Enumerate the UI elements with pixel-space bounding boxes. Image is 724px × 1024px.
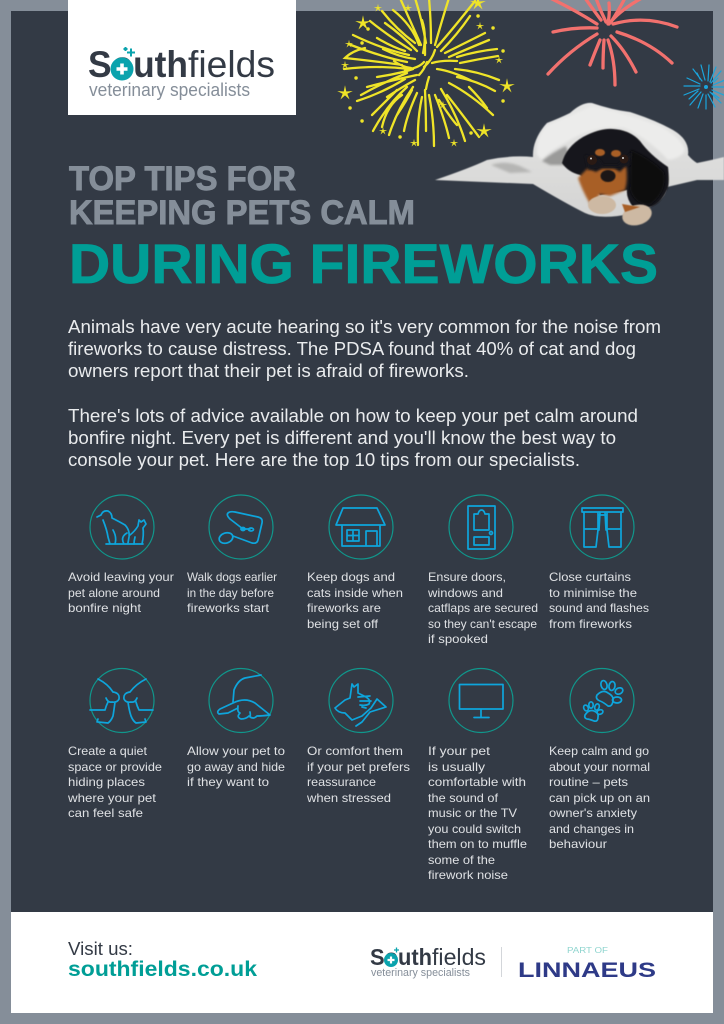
blue firework: [684, 65, 724, 109]
tip text: keep dogs and cats inside: fireworks are: [307, 601, 381, 615]
tip text: keep calm: owner's anxiety: [549, 806, 637, 820]
tip text: music or tv: comfortable with: [428, 775, 526, 789]
red firework: [548, 0, 677, 85]
intro paragraph two: bonfire night. Every pet is different and you'll know the best way to: [68, 427, 616, 448]
tip text: comfort them: if your pet prefers: [307, 760, 410, 774]
tip text: keep calm: and changes in: [549, 822, 634, 836]
tip text: avoid leaving pet alone: pet alone around: [68, 586, 160, 600]
footer panel: southfields.co.uk: [68, 957, 257, 981]
tip text: music or tv: If your pet: [428, 744, 491, 758]
tip text: create a quiet space: hiding places: [68, 775, 145, 789]
tip text: keep calm: routine – pets: [549, 775, 628, 789]
tip text: avoid leaving pet alone: bonfire night: [68, 601, 142, 615]
intro paragraph one: fireworks to cause distress. The PDSA found that 40% of cat and dog: [68, 338, 636, 359]
tip text: create a quiet space: space or provide: [68, 760, 162, 774]
tip text: music or tv: firework noise: [428, 868, 508, 882]
title: KEEPING PETS CALM: [69, 194, 415, 232]
tip text: comfort them: [306, 744, 410, 805]
footer panel: [11, 912, 713, 1013]
icon: curtains: [570, 495, 634, 559]
tip text: walk dogs earlier: [187, 570, 277, 615]
yellow firework: [337, 0, 515, 147]
intro paragraph two: [68, 405, 638, 470]
intro paragraph one: Animals have very acute hearing so it's very common for the noise from: [68, 316, 661, 337]
tip text: allow your pet to hide: if they want to: [187, 775, 269, 789]
icon: paw prints: [570, 668, 634, 732]
tip text: music or tv: [428, 744, 527, 882]
tip text: close curtains: from fireworks: [549, 617, 632, 631]
tip text: keep calm: about your normal: [549, 760, 650, 774]
tip text: keep dogs and cats inside: being set off: [307, 617, 379, 631]
tip text: allow your pet to hide: Allow your pet to: [187, 744, 285, 758]
tip text: allow your pet to hide: go away and hide: [187, 760, 285, 774]
tip text: music or tv: you could switch: [428, 822, 521, 836]
panel: logo card: South: [88, 44, 188, 85]
tip text: keep calm: Keep calm and go: [549, 744, 649, 758]
tip text: create a quiet space: can feel safe: [68, 806, 143, 820]
footer panel: LINNAEUS: [518, 959, 656, 982]
tip text: avoid leaving pet alone: [68, 570, 174, 615]
tip text: close curtains: to minimise the: [549, 586, 637, 600]
tip text: music or tv: some of the: [428, 853, 495, 867]
tip text: ensure doors secured: [427, 570, 538, 646]
icon: pet hiding under cover: [209, 668, 273, 732]
tip text: close curtains: Close curtains: [549, 570, 631, 584]
icon: house: [329, 495, 393, 559]
photo: dog wrapped in a blanket: [435, 103, 724, 229]
icon: television: [449, 668, 513, 732]
tip text: close curtains: [549, 570, 649, 631]
tip text: walk dogs earlier: in the day before: [187, 586, 274, 600]
tip text: music or tv: music or the TV: [428, 806, 517, 820]
tip text: create a quiet space: [67, 744, 162, 820]
icon: dog and cat: [90, 495, 154, 559]
icon: hand comforting dog: [329, 668, 393, 732]
tip text: create a quiet space: Create a quiet: [68, 744, 148, 758]
tip text: music or tv: is usually: [428, 760, 485, 774]
tip text: comfort them: Or comfort them: [307, 744, 403, 758]
intro paragraph one: [68, 316, 661, 381]
panel: logo card: veterinary specialists: [89, 80, 250, 100]
icon: dog lead: [209, 495, 273, 559]
tip text: keep calm: can pick up on an: [549, 791, 650, 805]
intro paragraph two: console your pet. Here are the top 10 tips from our specialists.: [68, 449, 580, 470]
intro paragraph two: There's lots of advice available on how to keep your pet calm around: [68, 405, 638, 426]
intro paragraph one: owners report that their pet is afraid of fireworks.: [68, 360, 469, 381]
tip text: create a quiet space: where your pet: [67, 791, 157, 805]
tip text: keep dogs and cats inside: cats inside when: [307, 586, 403, 600]
tip text: music or tv: them on to muffle: [428, 837, 527, 851]
title: [69, 160, 658, 295]
tip text: keep calm: [549, 744, 650, 851]
footer panel: South: [370, 944, 432, 970]
tip text: ensure doors secured: Ensure doors,: [428, 570, 506, 584]
tip text: comfort them: reassurance: [307, 775, 376, 789]
tip text: music or tv: the sound of: [428, 791, 499, 805]
tip text: allow your pet to hide: [187, 744, 285, 789]
title: DURING FIREWORKS: [69, 232, 658, 295]
tip text: avoid leaving pet alone: Avoid leaving your: [68, 570, 174, 584]
title: TOP TIPS FOR: [69, 160, 296, 198]
tip text: walk dogs earlier: fireworks start: [187, 601, 270, 615]
panel: logo card: [68, 0, 296, 115]
tip text: keep calm: behaviour: [549, 837, 607, 851]
tip text: keep dogs and cats inside: [307, 570, 403, 631]
tip text: close curtains: sound and flashes: [549, 601, 649, 615]
tip text: ensure doors secured: catflaps are secured: [428, 601, 538, 615]
tip text: ensure doors secured: so they can't escape: [428, 617, 537, 631]
tip text: comfort them: when stressed: [306, 791, 391, 805]
footer panel: PART OF: [567, 946, 608, 955]
footer panel: veterinary specialists: [371, 967, 470, 979]
tip text: ensure doors secured: windows and: [427, 586, 503, 600]
tip text: ensure doors secured: if spooked: [428, 632, 488, 646]
icon: door: [449, 495, 513, 559]
footer panel: fields: [432, 944, 486, 970]
tip text: keep dogs and cats inside: Keep dogs and: [307, 570, 395, 584]
tip text: walk dogs earlier: Walk dogs earlier: [187, 570, 277, 584]
footer panel: Visit us:: [68, 938, 133, 959]
panel: logo card: fields: [188, 44, 275, 85]
icon: quiet hiding space: [90, 668, 154, 732]
